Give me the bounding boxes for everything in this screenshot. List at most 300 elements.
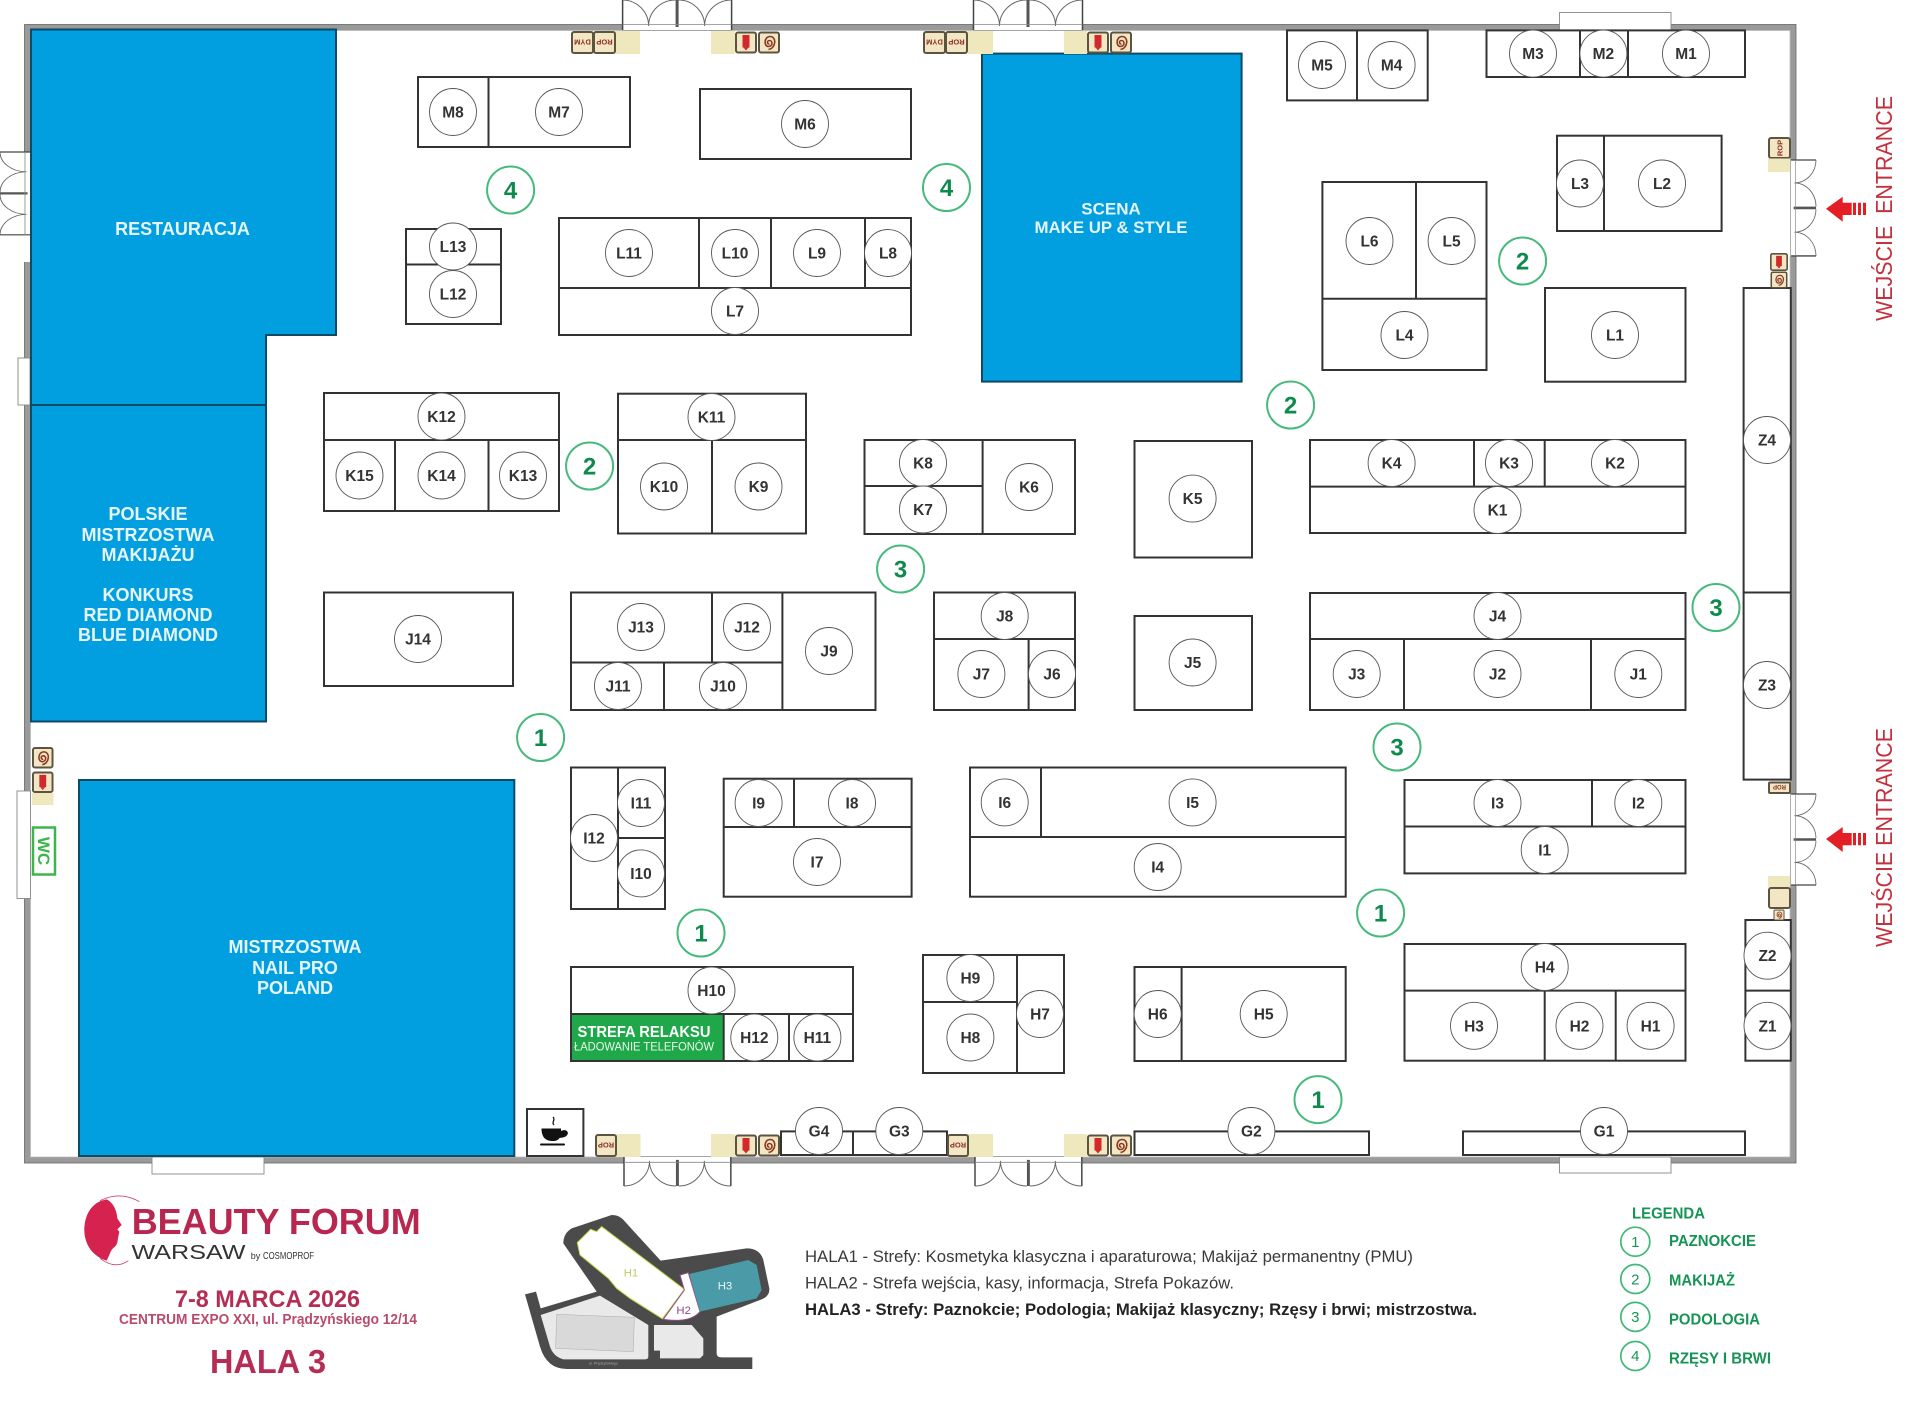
zone marker 4: 4 (940, 175, 954, 202)
label H10: H10 (697, 983, 726, 1000)
hall zones description (805, 1247, 1477, 1319)
label H8 (947, 1014, 994, 1061)
label M7 (536, 88, 582, 136)
icon: coffee cafe box (527, 1109, 583, 1156)
zone: restauracja: RESTAURACJA (115, 219, 250, 239)
label H5 (1240, 990, 1287, 1038)
zone marker 3 (1692, 584, 1740, 631)
legend item 2 (1621, 1264, 1650, 1294)
zone: mistrzostwa nail pro poland (79, 780, 514, 1156)
hall title: HALA 3 (210, 1343, 326, 1380)
zone marker 2: 2 (1516, 248, 1529, 276)
zone: scena make up and style (982, 54, 1242, 382)
label H2: H2 (1570, 1018, 1589, 1035)
zone marker 1 (517, 714, 564, 761)
label J11: J11 (605, 678, 631, 696)
label J12: J12 (734, 620, 760, 636)
label I5: I5 (1186, 795, 1199, 812)
entrance label upper: WEJŚCIE ENTRANCE (1870, 96, 1897, 321)
label K12 (418, 393, 465, 440)
label L1 (1592, 312, 1638, 358)
legend: PAZNOKCIE (1669, 1233, 1756, 1250)
label K4 (1368, 440, 1415, 486)
booths I6 I5 I4 (970, 768, 1346, 897)
label L9 (794, 230, 840, 276)
label K6: K6 (1019, 480, 1039, 496)
label K15 (336, 452, 383, 499)
label M6: M6 (794, 116, 816, 134)
window bottom left (152, 1157, 264, 1174)
label J6: J6 (1043, 666, 1061, 684)
label K1 (1474, 486, 1521, 534)
safety icons bottom door 2 (948, 1134, 1131, 1157)
site location map: ul. Prądzyńskiego (589, 1361, 618, 1365)
label I2 (1615, 780, 1662, 826)
label K12: K12 (427, 409, 456, 426)
booths H6 H5 (1134, 967, 1346, 1061)
label H10 (688, 967, 735, 1014)
label I6: I6 (998, 795, 1012, 812)
label I7 (794, 838, 840, 886)
zone marker 4: 4 (504, 178, 518, 204)
label L10 (712, 230, 758, 276)
safety icons top door 2: DYM (926, 38, 943, 46)
event date: 7-8 MARCA 2026 (175, 1286, 360, 1313)
logo: beauty forum warsaw: WARSAW (132, 1242, 246, 1264)
label L5: L5 (1443, 234, 1461, 250)
label H4 (1521, 944, 1568, 990)
strefa relaksu (571, 1014, 724, 1061)
label I1: I1 (1538, 842, 1552, 860)
label I2: I2 (1632, 796, 1645, 812)
zone marker 3 (1374, 724, 1420, 770)
label L4 (1381, 312, 1428, 358)
label K15: K15 (345, 468, 374, 485)
booths L11 to L7 (559, 218, 912, 335)
zone: mistrzostwa nail pro poland: MISTRZOSTWA (228, 937, 362, 957)
label I3: I3 (1491, 796, 1504, 812)
label G4: G4 (809, 1124, 830, 1140)
label K11: K11 (698, 410, 726, 426)
zone marker 3 (877, 546, 924, 592)
label J4 (1474, 592, 1521, 640)
legend item 3: 3 (1631, 1309, 1639, 1326)
zone marker 4 (923, 164, 970, 211)
label L7 (712, 288, 758, 334)
booths H10 H11 H12 and relax zone (571, 967, 853, 1061)
wc sign (33, 828, 55, 874)
label I11: I11 (631, 796, 652, 812)
label J4: J4 (1489, 608, 1506, 626)
booths J8 J7 J6 (934, 592, 1076, 710)
booths Z2 Z1 (1744, 920, 1791, 1061)
label G4 (796, 1108, 842, 1154)
label I9: I9 (752, 796, 765, 812)
door left (0, 152, 33, 235)
label K7: K7 (913, 502, 933, 519)
label K2: K2 (1605, 456, 1625, 472)
booths K4 to K1 (1310, 440, 1686, 534)
label I12: I12 (583, 830, 605, 848)
safety icons bottom door 2: ROP (950, 1140, 966, 1150)
zone marker 1: 1 (534, 725, 547, 752)
label J2: J2 (1489, 666, 1506, 684)
label K6 (1006, 464, 1052, 510)
zone marker 1 (1357, 890, 1404, 936)
legend item 2: 2 (1631, 1271, 1639, 1288)
booths I3 I2 I1 (1404, 780, 1686, 874)
label J10: J10 (710, 678, 736, 696)
window left upper (18, 358, 30, 405)
legend (1621, 1206, 1771, 1370)
label L1: L1 (1606, 328, 1624, 344)
label G2 (1228, 1108, 1275, 1154)
door bottom 1 (624, 1155, 731, 1186)
door right upper (1789, 160, 1816, 256)
icon: face silhouette (84, 1196, 139, 1265)
label I7: I7 (811, 854, 823, 872)
zone: polskie mistrzostwa makijazu (31, 405, 266, 722)
zone marker 3: 3 (894, 556, 907, 584)
hall zones description: HALA3 - Strefy: Paznokcie; Podologia; Makijaż klasyczny; Rzęsy i brwi; mistrzostwa. (805, 1300, 1477, 1319)
label L7: L7 (726, 304, 744, 320)
label L8: L8 (879, 246, 897, 262)
label Z3 (1744, 662, 1790, 708)
strefa relaksu: ŁADOWANIE TELEFONÓW (574, 1038, 715, 1054)
label L4: L4 (1395, 328, 1414, 344)
zone: mistrzostwa nail pro poland: NAIL PRO (252, 958, 338, 978)
legend: MAKIJAŻ (1669, 1272, 1736, 1290)
zone: polskie mistrzostwa makijazu: KONKURS (102, 585, 194, 605)
label L8 (864, 230, 912, 276)
label K1: K1 (1488, 502, 1508, 520)
label J14: J14 (405, 632, 431, 648)
label J13 (618, 604, 664, 650)
booths J4 to J1 (1310, 592, 1686, 710)
label I8: I8 (846, 796, 859, 812)
booths L13 L12 (406, 223, 501, 324)
label K13: K13 (509, 468, 538, 485)
label I3 (1474, 780, 1521, 826)
label H11: H11 (804, 1030, 832, 1047)
logo: beauty forum warsaw: COSMOPROF (263, 1251, 314, 1262)
label J12 (724, 604, 770, 650)
label J9: J9 (820, 644, 838, 660)
label J2 (1474, 650, 1521, 698)
door bottom 2 (975, 1155, 1082, 1186)
label I10 (618, 850, 664, 897)
site location map (525, 1215, 769, 1369)
booth J14 (324, 592, 513, 686)
logo: beauty forum warsaw: BEAUTY FORUM (132, 1201, 421, 1242)
zone marker 2: 2 (583, 454, 596, 480)
label J9 (806, 628, 852, 674)
label L13: L13 (440, 239, 467, 256)
hall outer wall (23, 24, 1796, 1163)
safety icons top door 1: DYM (574, 38, 591, 46)
window left lower (17, 791, 30, 898)
entrance label lower: WEJŚCIE ENTRANCE (1870, 728, 1897, 947)
booths L3 L2 (1556, 136, 1722, 231)
zone: polskie mistrzostwa makijazu: POLSKIE (108, 504, 188, 524)
label K9: K9 (749, 479, 769, 496)
legend item 1 (1621, 1227, 1650, 1256)
label K14 (418, 452, 465, 499)
booths J13 to J9 (571, 592, 876, 710)
label H5: H5 (1254, 1006, 1274, 1024)
label H6: H6 (1148, 1006, 1168, 1024)
label J7 (958, 650, 1005, 698)
booths Z4 Z3 (1744, 288, 1791, 780)
booth J5 (1134, 616, 1252, 710)
label K7 (900, 486, 946, 533)
zone: scena make up and style: SCENA (1081, 200, 1141, 218)
label Z1: Z1 (1758, 1018, 1777, 1035)
label L9: L9 (808, 246, 826, 262)
safety icons top door 1: ROP (596, 38, 613, 46)
label H9 (947, 954, 994, 1002)
label I8 (828, 780, 876, 826)
door right lower (1789, 794, 1816, 885)
zone marker 2 (1267, 382, 1314, 428)
label K11 (688, 394, 735, 440)
label J10 (700, 662, 746, 710)
label H3 (1450, 1002, 1498, 1049)
label M2: M2 (1593, 46, 1614, 63)
site location map: H3 (718, 1281, 732, 1293)
label L2: L2 (1653, 176, 1671, 193)
label I4 (1134, 844, 1181, 890)
zone marker 2: 2 (1284, 392, 1297, 420)
booths H9 H8 H7 (923, 954, 1064, 1073)
label K3 (1486, 440, 1532, 486)
label J13: J13 (628, 620, 654, 636)
wc sign: WC (34, 837, 53, 865)
label H7: H7 (1030, 1006, 1050, 1024)
label I1 (1521, 826, 1568, 874)
zone marker 1 (678, 910, 724, 956)
site location map: H2 (676, 1305, 691, 1317)
zone: polskie mistrzostwa makijazu: MAKIJAŻU (102, 545, 194, 565)
booths I9 I8 I7 (724, 779, 912, 897)
label J7: J7 (973, 666, 990, 684)
safety icons top door 2 (924, 31, 1131, 54)
safety icons right wall lower: ROP (1773, 783, 1786, 789)
label M1: M1 (1675, 46, 1697, 63)
label I11 (618, 780, 664, 826)
safety icons right wall upper (1768, 138, 1790, 288)
label L3 (1556, 160, 1604, 207)
booths H4 H3 H2 H1 (1404, 944, 1686, 1061)
label H12: H12 (740, 1030, 769, 1047)
label G1: G1 (1594, 1124, 1615, 1140)
label M4: M4 (1381, 58, 1403, 74)
label M7: M7 (548, 104, 570, 122)
label K9 (735, 463, 782, 510)
safety icons bottom door 1: ROP (598, 1140, 614, 1150)
label K5: K5 (1183, 491, 1203, 508)
label M5: M5 (1311, 58, 1333, 74)
booth G2 (1134, 1108, 1369, 1155)
zone: polskie mistrzostwa makijazu: MISTRZOSTWA (82, 525, 214, 545)
label M6 (782, 100, 828, 148)
label L5 (1428, 218, 1475, 264)
site location map: H1 (624, 1267, 638, 1279)
label H11 (794, 1014, 841, 1061)
label M8 (430, 88, 476, 136)
label K14: K14 (427, 468, 456, 485)
booth M6 (700, 89, 911, 159)
label H4: H4 (1535, 960, 1555, 976)
window top right (1560, 12, 1671, 30)
zone marker 1: 1 (1311, 1087, 1325, 1114)
label J3 (1333, 650, 1380, 698)
hall zones description: HALA2 - Strefa wejścia, kasy, informacja, Strefa Pokazów. (805, 1274, 1234, 1292)
label G1 (1580, 1108, 1628, 1154)
label J11 (594, 662, 642, 710)
label H1: H1 (1641, 1018, 1661, 1035)
safety icons right wall lower (1768, 782, 1790, 920)
label J1 (1615, 650, 1662, 698)
label H9: H9 (960, 970, 981, 988)
window bottom right (1560, 1157, 1671, 1173)
label J5: J5 (1184, 655, 1202, 672)
label L6 (1346, 218, 1393, 264)
label K8 (900, 440, 946, 486)
label I6 (981, 779, 1028, 826)
label L11: L11 (616, 246, 642, 262)
label H12 (731, 1014, 778, 1061)
label Z4 (1744, 416, 1790, 464)
label L10: L10 (722, 246, 748, 262)
label J14 (394, 616, 442, 662)
label J6 (1028, 650, 1076, 698)
legend item 3 (1621, 1302, 1650, 1331)
label G3 (876, 1108, 923, 1154)
label L11 (606, 230, 652, 276)
label I10: I10 (630, 866, 652, 883)
label K4: K4 (1382, 456, 1402, 472)
legend item 1: 1 (1631, 1234, 1639, 1251)
zone: scena make up and style: MAKE UP & STYLE (1034, 218, 1188, 237)
booths M8 M7 (418, 77, 630, 147)
label K10 (640, 463, 688, 510)
legend: PODOLOGIA (1669, 1312, 1760, 1328)
label K10: K10 (650, 479, 678, 496)
label Z3: Z3 (1758, 678, 1776, 694)
label Z4: Z4 (1758, 432, 1776, 450)
door top 2 (974, 0, 1082, 32)
label J8: J8 (996, 608, 1014, 626)
legend: LEGENDA (1632, 1206, 1705, 1222)
safety icons top door 2: ROP (948, 38, 965, 46)
label L12: L12 (440, 286, 466, 304)
label G2: G2 (1241, 1124, 1262, 1140)
arrow: entrance upper (1826, 197, 1866, 222)
label J8 (981, 592, 1028, 640)
label I4: I4 (1151, 860, 1165, 876)
label G3: G3 (889, 1124, 910, 1140)
label Z2 (1744, 932, 1791, 979)
zone: restauracja (31, 30, 336, 405)
label M2 (1580, 30, 1627, 77)
booths K8 K7 K6 (864, 440, 1075, 534)
label L3: L3 (1571, 176, 1589, 193)
label J1: J1 (1630, 666, 1647, 684)
safety icons right wall upper: ROP (1776, 140, 1784, 156)
legend: RZĘSY I BRWI (1669, 1350, 1771, 1368)
label I9 (735, 780, 782, 826)
label M5 (1298, 42, 1346, 88)
label M8: M8 (442, 104, 464, 122)
label H6 (1134, 990, 1181, 1038)
booths M3 M2 M1 (1486, 30, 1745, 77)
booths I12 I11 I10 (570, 768, 665, 909)
safety icons left wall (32, 748, 54, 805)
booths K12 to K15 (324, 393, 559, 511)
label M3 (1510, 30, 1556, 77)
label M1 (1662, 30, 1710, 77)
label H3: H3 (1464, 1018, 1484, 1035)
label H2 (1556, 1002, 1603, 1049)
booths L6 L5 L4 (1322, 182, 1486, 370)
label H1 (1627, 1002, 1674, 1049)
logo: beauty forum warsaw (84, 1196, 421, 1265)
label M4 (1368, 42, 1415, 88)
door top 1 (623, 0, 732, 32)
strefa relaksu: STREFA RELAKSU (578, 1024, 710, 1041)
zone marker 4 (487, 166, 534, 214)
arrow: entrance lower (1826, 827, 1866, 852)
zone marker 3: 3 (1709, 595, 1723, 622)
zone: polskie mistrzostwa makijazu: BLUE DIAMOND (78, 625, 218, 645)
logo: beauty forum warsaw: by (251, 1251, 261, 1261)
safety icons bottom door 1 (596, 1134, 779, 1157)
label H8: H8 (960, 1030, 981, 1047)
safety icons top door 1 (572, 31, 779, 54)
legend item 4 (1621, 1342, 1650, 1370)
label I5 (1169, 779, 1216, 826)
booths M5 M4 (1287, 30, 1428, 100)
zone marker 3: 3 (1390, 734, 1404, 762)
zone marker 2 (566, 442, 613, 490)
label K3: K3 (1499, 456, 1519, 472)
booth K5 (1134, 441, 1252, 558)
zone: mistrzostwa nail pro poland: POLAND (257, 978, 333, 998)
label K2 (1592, 440, 1638, 486)
zone marker 1: 1 (1374, 900, 1387, 928)
label K8: K8 (913, 456, 933, 472)
label H7 (1016, 990, 1064, 1038)
label Z2: Z2 (1758, 948, 1777, 965)
zone marker 1: 1 (694, 920, 708, 948)
label M3: M3 (1522, 46, 1544, 63)
event address: CENTRUM EXPO XXI, ul. Prądzyńskiego 12/14 (119, 1312, 417, 1328)
booth G1 (1463, 1108, 1745, 1155)
zone marker 1 (1294, 1076, 1342, 1123)
label L2 (1638, 160, 1686, 207)
legend item 4: 4 (1631, 1348, 1639, 1365)
zone marker 2 (1499, 238, 1546, 284)
zone: polskie mistrzostwa makijazu: RED DIAMOND (84, 605, 212, 625)
label I12 (570, 814, 618, 862)
label K13 (500, 452, 546, 499)
label Z1 (1744, 1002, 1791, 1049)
label J3: J3 (1348, 666, 1366, 684)
booths K11 K10 K9 (618, 394, 806, 534)
booths G4 G3 (781, 1108, 947, 1155)
booth L1 (1545, 288, 1686, 382)
